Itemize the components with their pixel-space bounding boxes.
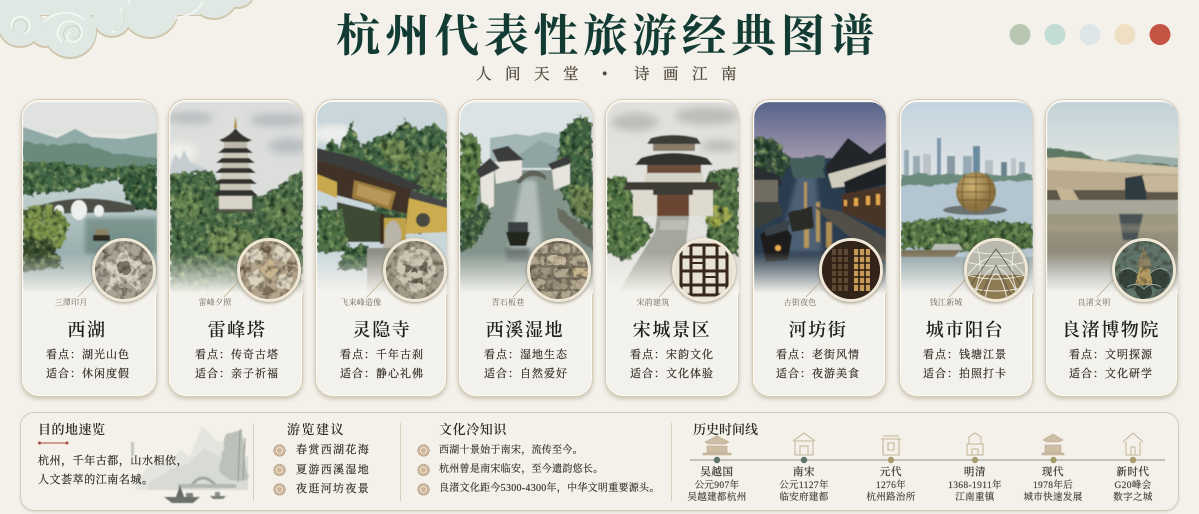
photo: Hefang Street xyxy=(754,102,886,294)
photo: Xixi Wetland xyxy=(460,102,593,294)
jade cloud ornament xyxy=(0,0,253,59)
medallion: night lantern window xyxy=(819,238,883,302)
connector line xyxy=(948,279,966,298)
icon: gate tower xyxy=(881,436,901,455)
suitable for: 适合：自然爱好 xyxy=(484,368,568,380)
connector line xyxy=(224,281,239,298)
card: 西湖 xyxy=(21,99,157,397)
tip 3: 夜逛河坊夜景 xyxy=(296,483,370,495)
photo: City Balcony xyxy=(901,102,1033,294)
name: 良渚博物院 xyxy=(1062,320,1160,340)
caption: 青石板巷 xyxy=(492,298,524,307)
tip icons xyxy=(273,444,286,496)
medallion: lattice window xyxy=(672,238,736,302)
highlight: 看点：湿地生态 xyxy=(484,349,568,361)
description: 杭州，千年古都，山水相依， xyxy=(38,455,188,467)
era: 现代 xyxy=(1023,466,1083,503)
era: 元代: 杭州路治所 xyxy=(866,493,916,503)
name: 灵隐寺 xyxy=(353,320,411,340)
heading: 文化冷知识 xyxy=(439,422,507,437)
era: 现代: 现代 xyxy=(1042,467,1064,478)
era: 元代: 1276年 xyxy=(876,480,906,490)
fact icons xyxy=(417,444,430,496)
pagoda xyxy=(213,116,258,212)
card: 灵隐寺 xyxy=(315,99,447,397)
timeline nodes xyxy=(714,457,1136,463)
divider xyxy=(400,423,401,501)
era: 吴越国 xyxy=(687,466,747,503)
description: 人文荟萃的江南名城。 xyxy=(38,474,154,486)
era: 新时代: G20峰会 xyxy=(1114,480,1152,490)
icon: arched hall xyxy=(793,433,815,455)
era: 明清 xyxy=(948,466,1002,503)
caption: 宋韵建筑 xyxy=(637,298,669,307)
suitable for: 适合：亲子祈福 xyxy=(195,368,279,380)
photo: Lingyin Temple xyxy=(317,102,447,294)
era: 新时代: 数字之城 xyxy=(1113,493,1153,503)
highlight: 看点：宋韵文化 xyxy=(630,349,714,361)
caption: 雷峰夕照 xyxy=(199,298,231,307)
era: 现代: 城市快速发展 xyxy=(1023,493,1083,503)
icon: ming tower xyxy=(967,433,983,455)
panel: bottom info bar xyxy=(20,412,1179,511)
caption: 良渚文明 xyxy=(1078,298,1110,307)
divider xyxy=(253,423,254,501)
connector line xyxy=(78,280,94,298)
medallion: stone carving xyxy=(92,238,156,302)
card: 雷峰塔 xyxy=(168,99,303,397)
highlight: 看点：湖光山色 xyxy=(46,349,130,361)
fact 1: 西湖十景始于南宋，流传至今。 xyxy=(439,445,583,456)
highlight: 看点：钱塘江景 xyxy=(923,349,1007,361)
connector line xyxy=(366,278,384,298)
era: 南宋: 临安府建都 xyxy=(779,493,829,503)
description xyxy=(38,454,188,486)
card: 西溪湿地 xyxy=(458,99,593,397)
connector line xyxy=(1096,279,1114,298)
name: 河坊街 xyxy=(789,320,847,340)
suitable for: 适合：休闲度假 xyxy=(46,368,130,380)
era: 南宋: 南宋 xyxy=(793,467,815,478)
subtitle xyxy=(476,66,750,83)
red rule xyxy=(38,442,68,444)
heading: 游览建议 xyxy=(287,422,345,437)
name: 城市阳台 xyxy=(926,320,1004,340)
caption: 古街夜色 xyxy=(784,298,816,307)
subtitle right: 诗画江南 xyxy=(634,66,750,83)
photo: Songcheng xyxy=(607,102,739,294)
section: history timeline xyxy=(687,422,1165,503)
icon: new era house xyxy=(1123,433,1143,455)
suitable for: 适合：拍照打卡 xyxy=(923,368,1007,380)
era: 明清: 1368-1911年 xyxy=(948,480,1002,490)
era: 明清: 明清 xyxy=(964,467,986,478)
highlight: 看点：千年古刹 xyxy=(340,349,424,361)
suitable for: 适合：夜游美食 xyxy=(776,368,860,380)
card: 宋城景区 xyxy=(605,99,739,397)
era: 吴越国: 吴越国 xyxy=(700,467,734,478)
era: 南宋: 公元1127年 xyxy=(779,480,829,490)
tip 1: 春赏西湖花海 xyxy=(296,444,370,456)
card: 良渚博物院 xyxy=(1045,99,1178,397)
name: 宋城景区 xyxy=(633,320,711,340)
title: 杭州代表性旅游经典图谱 xyxy=(336,11,879,61)
connector line xyxy=(512,280,529,298)
subtitle left: 人间天堂 xyxy=(476,66,592,83)
medallion: brick relief xyxy=(237,238,301,302)
photo: Leifeng Pagoda xyxy=(170,102,303,294)
heading: 目的地速览 xyxy=(38,422,106,437)
card: 河坊街 xyxy=(752,99,886,397)
section: culture facts xyxy=(417,422,660,496)
era: 吴越国: 公元907年 xyxy=(695,480,739,490)
era: 南宋 xyxy=(779,466,829,503)
caption: 钱江新城 xyxy=(930,298,962,307)
caption: 飞来峰造像 xyxy=(340,298,382,307)
tip 2: 夏游西溪湿地 xyxy=(296,464,370,476)
heading: 历史时间线 xyxy=(693,422,758,437)
fact 3: 良渚文化距今5300-4300年，中华文明重要源头。 xyxy=(439,483,660,494)
caption: 三潭印月 xyxy=(55,298,87,307)
suitable for: 适合：文化研学 xyxy=(1069,368,1153,380)
era: 明清: 江南重镇 xyxy=(955,493,995,503)
card: 城市阳台 xyxy=(899,99,1033,397)
icon: modern hall xyxy=(1042,434,1064,455)
connector line xyxy=(806,281,821,298)
era: 元代: 元代 xyxy=(880,467,902,478)
photo: Liangzhu Museum xyxy=(1047,102,1178,294)
palette dots xyxy=(1010,24,1170,45)
photo: West Lake xyxy=(23,102,157,294)
connector line xyxy=(658,281,674,298)
medallion: Feilai Feng statue xyxy=(383,238,447,302)
name: 雷峰塔 xyxy=(208,320,266,340)
medallion: stone pavement xyxy=(527,238,591,302)
era: 元代 xyxy=(866,466,916,503)
section: visit tips xyxy=(273,422,370,496)
era: 吴越国: 吴越建都杭州 xyxy=(687,493,747,503)
name: 西湖 xyxy=(67,320,107,340)
name: 西溪湿地 xyxy=(486,320,564,340)
suitable for: 适合：文化体验 xyxy=(630,368,714,380)
highlight: 看点：文明探源 xyxy=(1069,349,1153,361)
divider xyxy=(671,423,672,501)
icon: palace xyxy=(703,436,731,455)
highlight: 看点：传奇古塔 xyxy=(195,349,279,361)
medallion: jade relic xyxy=(1112,238,1176,302)
era: 现代: 1978年后 xyxy=(1033,480,1073,490)
timeline graphic xyxy=(690,432,1165,464)
subtitle dot: • xyxy=(602,66,607,83)
highlight: 看点：老街风情 xyxy=(776,349,860,361)
fact 2: 杭州曾是南宋临安，至今遗韵悠长。 xyxy=(439,464,603,475)
era: 新时代 xyxy=(1113,466,1153,503)
section: destination overview xyxy=(38,422,188,486)
era: 新时代: 新时代 xyxy=(1116,467,1150,478)
ink landscape xyxy=(130,426,250,504)
medallion: glass lattice sphere xyxy=(964,238,1028,302)
suitable for: 适合：静心礼佛 xyxy=(340,368,424,380)
